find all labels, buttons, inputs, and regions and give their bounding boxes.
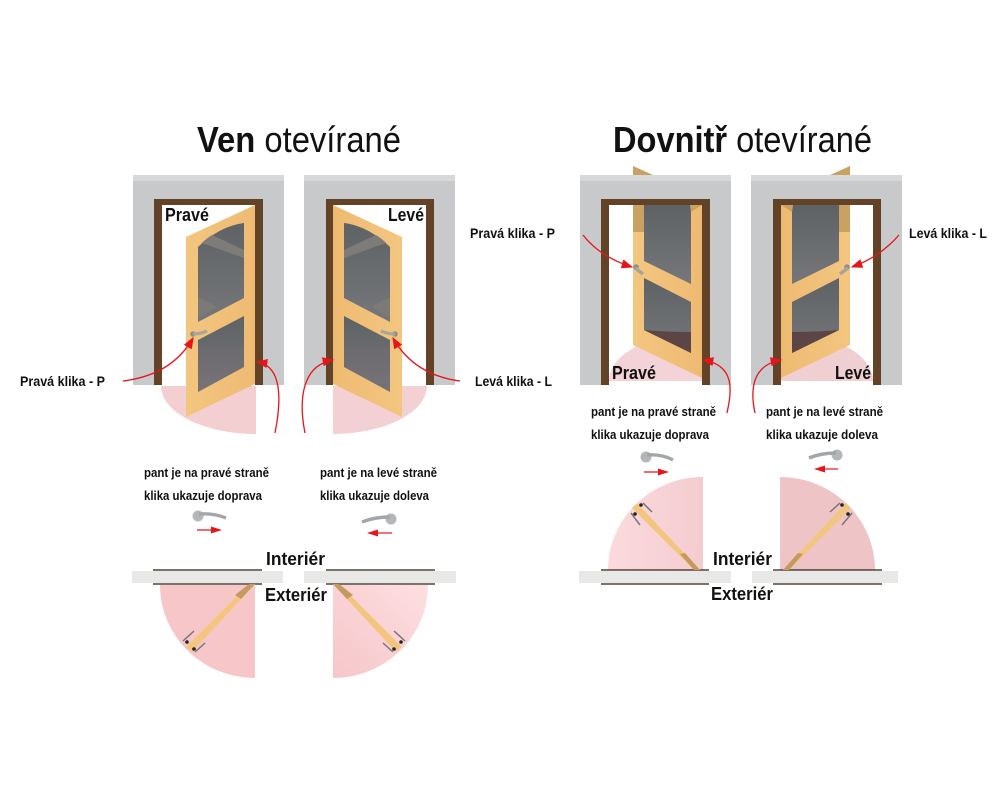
label: Levá klika L (outward): Levá klika - L bbox=[475, 373, 552, 389]
callout arrows: outward doors bbox=[123, 338, 460, 433]
title: Ven otevírané: Ven otevírané bbox=[197, 119, 401, 160]
title: Dovnitř otevírané: Dovnitř otevírané bbox=[613, 119, 872, 160]
text: inward right description: klika ukazuje doprava bbox=[591, 427, 710, 442]
callout arrows: inward doors bbox=[583, 235, 899, 413]
text: outward right description: klika ukazuje doprava bbox=[144, 488, 263, 503]
label: Interiér (right): Interiér bbox=[713, 549, 772, 569]
text: outward right description: pant je na pravé straně bbox=[144, 465, 269, 480]
text: outward left description: klika ukazuje doleva bbox=[320, 488, 430, 503]
door illustration: outward right-hinged bbox=[133, 175, 284, 434]
door illustration: inward left-hinged bbox=[751, 166, 902, 385]
label: Interiér (left): Interiér bbox=[266, 549, 325, 569]
label: Exteriér (right): Exteriér bbox=[711, 584, 773, 604]
door illustration: outward left-hinged bbox=[304, 175, 455, 434]
label: Pravá klika P (outward): Pravá klika - P bbox=[20, 373, 105, 389]
text: inward right description: pant je na pravé straně bbox=[591, 404, 716, 419]
icon: handle pointing left with arrow (inward) bbox=[809, 450, 842, 472]
plan view: inward left-hinged bbox=[752, 477, 898, 584]
text: inward left description: klika ukazuje doleva bbox=[766, 427, 879, 442]
label: Pravá klika P (inward): Pravá klika - P bbox=[470, 225, 555, 241]
label: Pravé (inward): Pravé bbox=[612, 363, 656, 383]
label: Levá klika L (inward): Levá klika - L bbox=[909, 225, 987, 241]
label: Pravé (outward): Pravé bbox=[165, 205, 209, 225]
icon: handle pointing right with arrow (inward) bbox=[640, 452, 673, 476]
icon: handle pointing right with arrow (outward) bbox=[192, 510, 226, 534]
icon: handle pointing left with arrow (outward) bbox=[362, 514, 396, 536]
text: outward left description: pant je na levé straně bbox=[320, 465, 437, 480]
text: inward left description bbox=[766, 404, 883, 442]
label: Levé (inward): Levé bbox=[835, 363, 871, 383]
plan view: inward right-hinged bbox=[579, 477, 731, 584]
door illustration: inward right-hinged bbox=[580, 166, 731, 385]
text: inward right description bbox=[591, 404, 716, 442]
label: Levé (outward): Levé bbox=[388, 205, 424, 225]
text: outward right description bbox=[144, 465, 269, 503]
plan view: outward left-hinged bbox=[304, 570, 456, 678]
plan view: outward right-hinged bbox=[132, 570, 283, 678]
text: outward left description bbox=[320, 465, 437, 503]
label: Exteriér (left): Exteriér bbox=[265, 585, 327, 605]
text: inward left description: pant je na levé straně bbox=[766, 404, 883, 419]
